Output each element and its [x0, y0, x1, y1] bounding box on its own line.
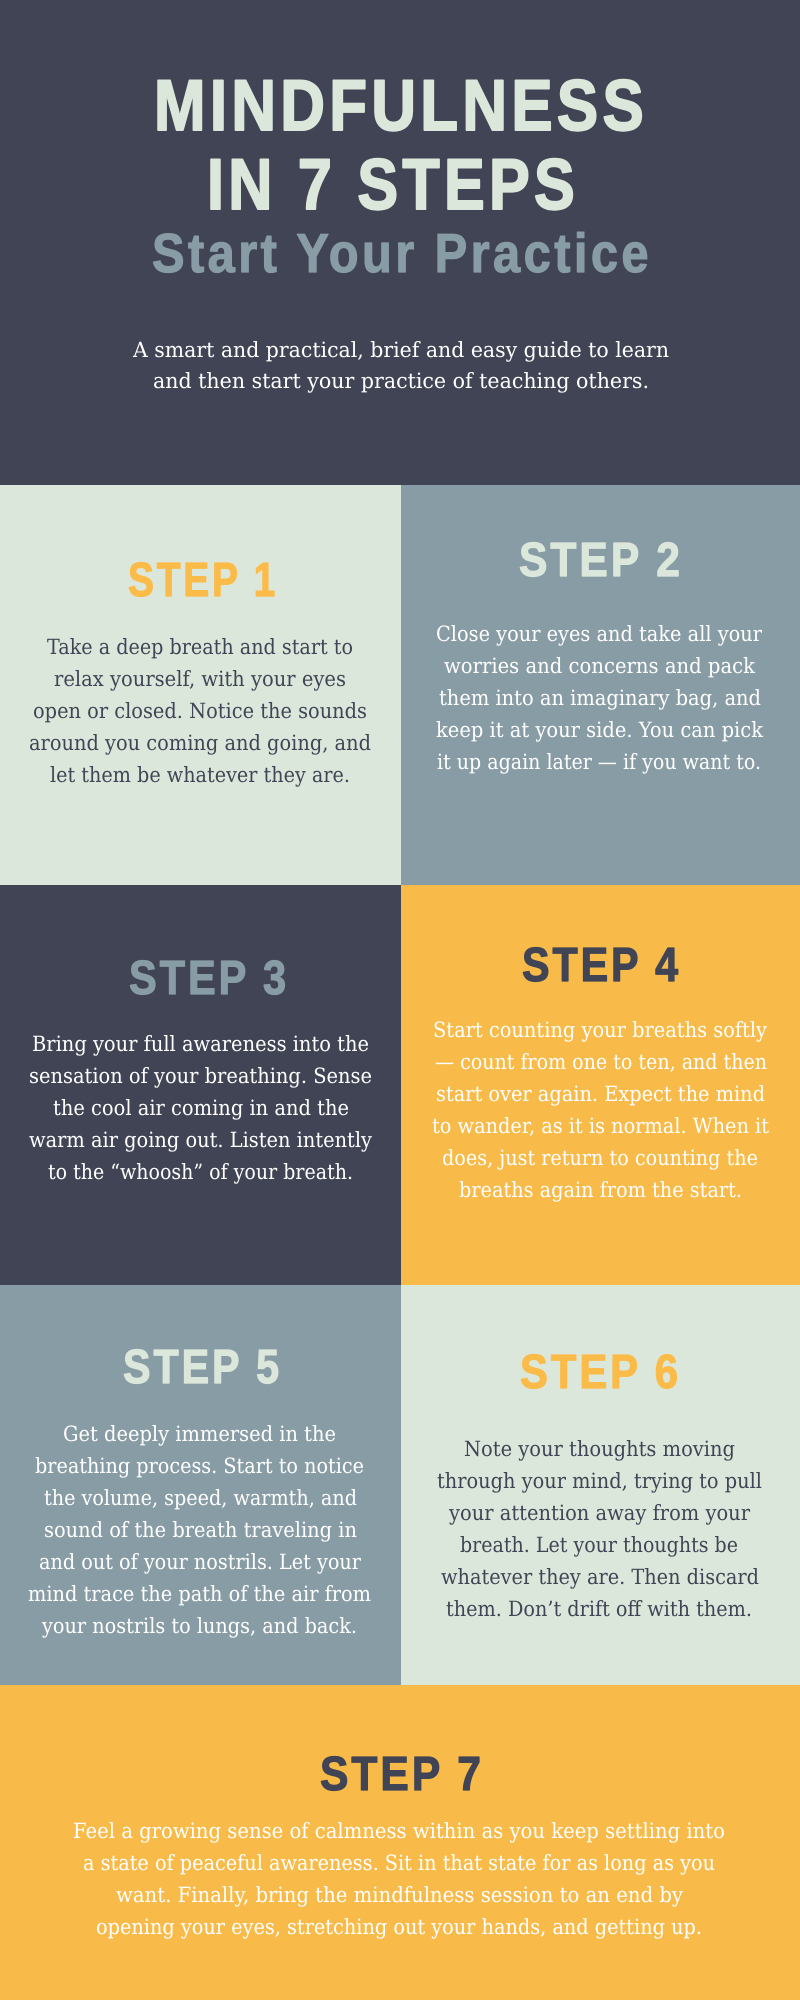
heading: step 1: STEP 1: [128, 554, 278, 607]
body: step 3: Bring your full awareness into the: [32, 1032, 369, 1056]
body: step 3: the cool air coming in and the: [53, 1096, 349, 1120]
body: step 2: keep it at your side. You can pick: [436, 718, 763, 742]
body: step 5: your nostrils to lungs, and back.: [41, 1614, 357, 1638]
body: step 5: Get deeply immersed in the: [63, 1422, 336, 1446]
body: step 5: [28, 1422, 371, 1638]
title: [154, 66, 648, 225]
body: step 6: Note your thoughts moving: [464, 1437, 735, 1461]
heading: step 7: STEP 7: [320, 1748, 484, 1801]
body: step 7: Feel a growing sense of calmness within as you keep settling into: [73, 1819, 725, 1843]
body: step 2: it up again later — if you want to.: [437, 750, 761, 774]
intro text: and then start your practice of teaching others.: [153, 369, 649, 393]
body: step 6: breath. Let your thoughts be: [460, 1533, 738, 1557]
panel: step 4: [401, 885, 800, 1285]
panel: step 5: [0, 1285, 401, 1685]
body: step 3: to the “whoosh” of your breath.: [48, 1160, 353, 1184]
body: step 4: [432, 1018, 770, 1202]
body: step 1: relax yourself, with your eyes: [54, 667, 346, 691]
panel: step 7: [0, 1685, 800, 2000]
body: step 7: want. Finally, bring the mindfulness session to an end by: [116, 1883, 683, 1907]
body: step 6: whatever they are. Then discard: [441, 1565, 759, 1589]
body: step 1: [29, 635, 371, 787]
body: step 2: [436, 622, 763, 774]
body: step 4: to wander, as it is normal. When it: [432, 1114, 770, 1138]
subtitle: Start Your Practice: [152, 222, 652, 284]
body: step 5: mind trace the path of the air from: [28, 1582, 371, 1606]
heading: step 2: STEP 2: [519, 534, 683, 587]
body: step 5: sound of the breath traveling in: [44, 1518, 357, 1542]
body: step 3: sensation of your breathing. Sense: [29, 1064, 372, 1088]
panel: step 6: [401, 1285, 800, 1685]
body: step 6: through your mind, trying to pull: [437, 1469, 762, 1493]
heading: step 5: STEP 5: [123, 1341, 282, 1394]
body: step 6: your attention away from your: [448, 1501, 751, 1525]
body: step 4: Start counting your breaths softly: [433, 1018, 767, 1042]
body: step 2: Close your eyes and take all your: [436, 622, 763, 646]
panel: step 1: [0, 485, 401, 885]
body: step 4: start over again. Expect the mind: [436, 1082, 765, 1106]
panel: header: [0, 0, 800, 485]
heading: step 4: STEP 4: [522, 939, 681, 992]
body: step 3: [29, 1032, 372, 1184]
body: step 1: open or closed. Notice the sounds: [33, 699, 367, 723]
body: step 5: breathing process. Start to notice: [35, 1454, 364, 1478]
body: step 6: them. Don’t drift off with them.: [446, 1597, 752, 1621]
title: IN 7 STEPS: [207, 145, 579, 225]
body: step 4: breaths again from the start.: [459, 1178, 742, 1202]
heading: step 6: STEP 6: [520, 1346, 681, 1399]
intro text: A smart and practical, brief and easy guide to learn: [132, 338, 669, 362]
body: step 2: them into an imaginary bag, and: [439, 686, 761, 710]
heading: step 3: STEP 3: [129, 952, 289, 1005]
body: step 3: warm air going out. Listen intently: [29, 1128, 372, 1152]
panel: step 2: [401, 485, 800, 885]
body: step 7: a state of peaceful awareness. Sit in that state for as long as you: [83, 1851, 715, 1875]
panel: step 3: [0, 885, 401, 1285]
body: step 7: [73, 1819, 725, 1939]
body: step 1: around you coming and going, and: [29, 731, 371, 755]
body: step 5: the volume, speed, warmth, and: [44, 1486, 357, 1510]
body: step 4: does, just return to counting the: [442, 1146, 758, 1170]
body: step 6: [437, 1437, 762, 1621]
title: MINDFULNESS: [154, 66, 648, 146]
body: step 4: — count from one to ten, and then: [435, 1050, 767, 1074]
intro text: [132, 338, 669, 393]
body: step 1: let them be whatever they are.: [50, 763, 350, 787]
body: step 7: opening your eyes, stretching out your hands, and getting up.: [96, 1915, 702, 1939]
body: step 5: and out of your nostrils. Let your: [39, 1550, 362, 1574]
body: step 1: Take a deep breath and start to: [47, 635, 353, 659]
body: step 2: worries and concerns and pack: [444, 654, 755, 678]
